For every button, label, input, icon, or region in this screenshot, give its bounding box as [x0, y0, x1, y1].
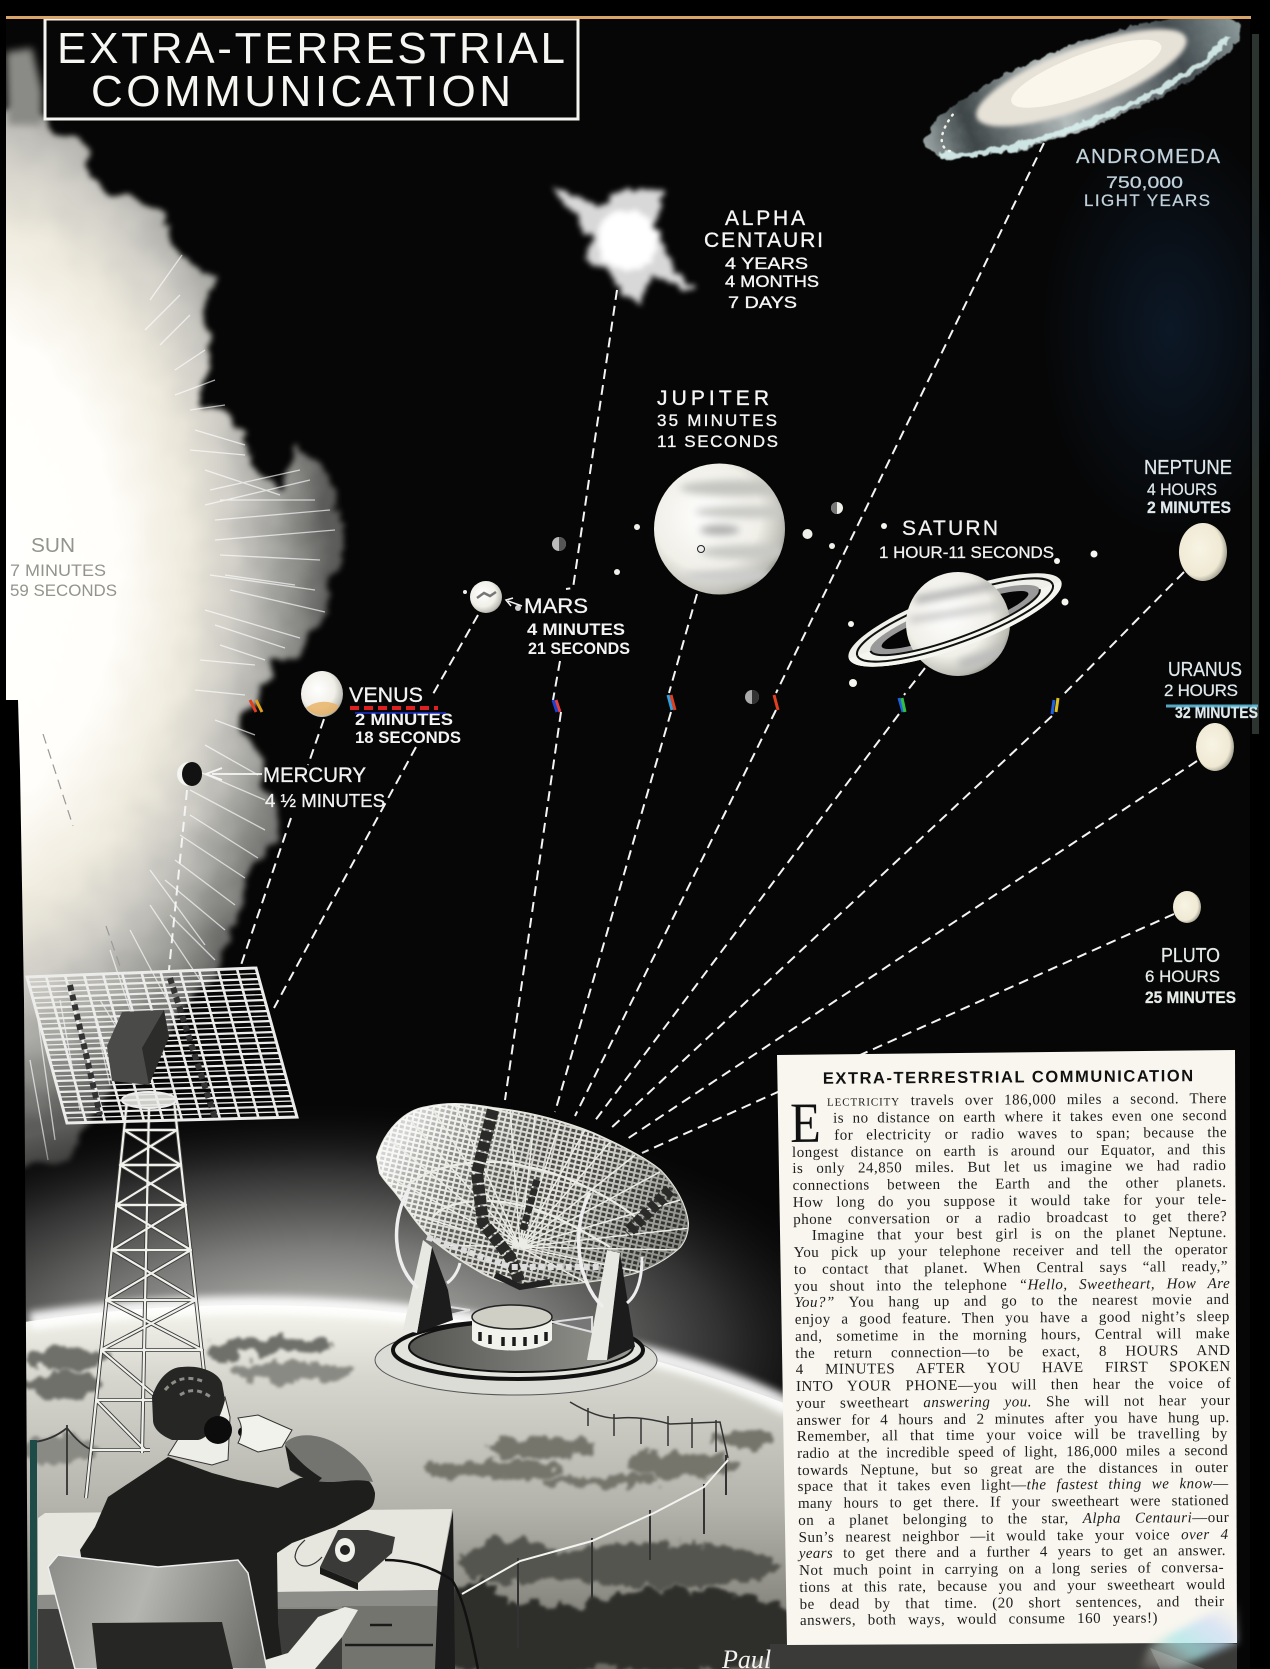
- jupiter label: JUPITER: [657, 387, 769, 410]
- text panel copy: space that it takes even light—the fastest thing we know—: [798, 1476, 1229, 1495]
- dish bowl: [370, 1100, 695, 1290]
- solar rays: [30, 255, 335, 1160]
- text panel copy: to contact that planet. When Central says “all ready,”: [794, 1259, 1228, 1278]
- grid antenna panel: [27, 968, 297, 1123]
- jacket and lower sleeve: [80, 1457, 375, 1669]
- text panel copy: Not much point in carrying on a long series of conversa-: [799, 1560, 1224, 1579]
- rainbow print misregistration marks: [250, 695, 1058, 714]
- text panel copy: Remember, all that time your voice will be travelling by: [797, 1426, 1228, 1445]
- arrow: mercury pointer: [206, 768, 262, 780]
- mercury label: MERCURY: [263, 764, 366, 787]
- arrow: mars pointer: [506, 598, 522, 606]
- andromeda label: 750,000: [1106, 173, 1183, 192]
- alpha centauri label: 7 DAYS: [728, 293, 797, 312]
- venus label: 18 SECONDS: [355, 728, 461, 747]
- saturn label: 1 HOUR-11 SECONDS: [879, 543, 1054, 562]
- neptune label: NEPTUNE: [1144, 457, 1232, 479]
- mars label: [524, 595, 630, 658]
- hand: [238, 1415, 292, 1452]
- text panel copy: your sweetheart answering you. She will not hear your: [796, 1393, 1230, 1412]
- jupiter label: 11 SECONDS: [657, 432, 778, 451]
- text panel copy: INTO YOUR PHONE—you will then hear the voice of: [796, 1376, 1231, 1395]
- clouds below text panel: [770, 1644, 1240, 1669]
- sun label: SUN: [31, 535, 75, 557]
- text panel background: [777, 1050, 1237, 1645]
- uranus label: URANUS: [1168, 659, 1242, 681]
- neptune label: 4 HOURS: [1147, 480, 1217, 499]
- sky glow above earth: [20, 1095, 800, 1395]
- uranus label: 2 HOURS: [1164, 681, 1238, 700]
- jupiter label: [657, 387, 778, 451]
- text panel copy: 4 MINUTES AFTER YOU HAVE FIRST SPOKEN: [796, 1359, 1231, 1378]
- jupiter: [654, 464, 785, 594]
- mars label: 4 MINUTES: [527, 620, 625, 639]
- text panel copy: many hours to get there. If your sweetheart were stationed: [798, 1493, 1229, 1512]
- venus label: VENUS: [349, 684, 423, 707]
- parabolic dish antenna: [370, 1100, 695, 1395]
- text panel copy: LECTRICITY travels over 186,000 miles a second. There: [827, 1091, 1227, 1110]
- alpha centauri label: CENTAURI: [704, 229, 823, 252]
- right page margin: [1250, 0, 1270, 1669]
- pluto: [1173, 891, 1201, 923]
- blue nebula tint: [1040, 120, 1270, 540]
- text panel copy: for electricity or radio waves to span; because the: [834, 1125, 1227, 1144]
- mercury label: [263, 764, 385, 811]
- sun label: 59 SECONDS: [10, 581, 117, 600]
- alpha centauri star: [551, 186, 694, 304]
- telephone receiver: [204, 1416, 248, 1444]
- saturn label: SATURN: [902, 517, 998, 540]
- title text: COMMUNICATION: [91, 67, 511, 116]
- alpha centauri label: ALPHA: [725, 207, 805, 230]
- text panel copy: longest distance on earth is around our Equator, and this: [792, 1142, 1226, 1161]
- text panel copy: connections between the Earth and the other planets.: [792, 1175, 1227, 1194]
- dashed signal lines: [43, 143, 1197, 1153]
- uranus label: [1164, 659, 1258, 722]
- title box: [45, 19, 578, 119]
- telephone: [295, 1530, 478, 1669]
- text panel copy: towards Neptune, but so great are the distances in outer: [797, 1460, 1228, 1479]
- hair: [152, 1367, 225, 1440]
- neck and face: [168, 1397, 230, 1465]
- saturn moons: [848, 523, 1098, 687]
- venus: [301, 671, 343, 717]
- text panel copy: Imagine that your best girl is on the planet Neptune.: [812, 1225, 1227, 1244]
- saturn label: [879, 517, 1054, 562]
- text panel copy: answer for 4 hours and 2 minutes after you have hung up.: [797, 1409, 1230, 1428]
- text panel copy: enjoy a good feature. Then you have a good night’s sleep: [795, 1309, 1230, 1328]
- andromeda galaxy: [910, 0, 1254, 185]
- venus label: 2 MINUTES: [355, 710, 453, 729]
- dish support legs: [397, 1187, 642, 1360]
- text panel copy: phone conversation or a radio broadcast to get there?: [793, 1209, 1227, 1228]
- rainbow glare on panel: [1140, 1600, 1237, 1669]
- pluto label: 25 MINUTES: [1145, 988, 1236, 1007]
- text panel copy: is no distance on earth where it takes even one second: [833, 1108, 1227, 1127]
- andromeda label: LIGHT YEARS: [1084, 191, 1210, 210]
- alpha centauri label: 4 MONTHS: [725, 272, 819, 291]
- sun label: 7 MINUTES: [10, 561, 106, 580]
- left poles: [34, 1425, 92, 1495]
- text panel copy: answers, both ways, would consume 160 years!): [800, 1611, 1158, 1629]
- desk: [38, 1509, 455, 1669]
- feed horn box: [107, 1010, 169, 1085]
- text panel copy: tions at this rate, because you and your sweetheart would: [799, 1577, 1225, 1596]
- text panel copy: You pick up your telephone receiver and tell the operator: [794, 1242, 1228, 1261]
- text panel copy: the return connection—to be exact, 8 HOURS AND: [795, 1342, 1230, 1361]
- jupiter moons: [552, 502, 843, 704]
- text panel copy: and, sometime in the morning hours, Central will make: [795, 1326, 1230, 1345]
- mercury: [177, 762, 202, 786]
- sun label: [10, 535, 117, 600]
- text panel copy: be dead by that time. (20 short sentences, and their: [800, 1594, 1225, 1613]
- telephone wires and poles: [462, 1402, 728, 1648]
- earth surface: [0, 1290, 1240, 1669]
- neptune label: [1144, 457, 1232, 517]
- neptune label: 2 MINUTES: [1147, 498, 1231, 517]
- article text: [792, 1091, 1231, 1629]
- mars label: 21 SECONDS: [528, 639, 630, 658]
- alpha centauri label: 4 YEARS: [725, 254, 808, 273]
- text panel copy: you shout into the telephone “Hello, Sweetheart, How Are: [794, 1275, 1230, 1294]
- upper sleeve: [285, 1435, 373, 1482]
- pluto label: 6 HOURS: [1145, 967, 1220, 986]
- mercury label: 4 ½ MINUTES: [265, 791, 385, 811]
- text panel copy: You?” You hang up and go to the nearest movie and: [794, 1292, 1230, 1311]
- venus label: [349, 684, 461, 747]
- sun: [0, 48, 346, 1170]
- clouds: [22, 1337, 800, 1669]
- neptune: [1179, 523, 1227, 581]
- chair: [48, 1555, 358, 1669]
- man on phone: [80, 1367, 375, 1669]
- mars label: MARS: [524, 595, 588, 618]
- andromeda label: ANDROMEDA: [1076, 145, 1220, 168]
- drop cap: E: [790, 1092, 821, 1155]
- alpha centauri label: [704, 207, 823, 312]
- lattice tower: [86, 1092, 204, 1498]
- text panel copy: radio at the incredible speed of light, 186,000 miles a second: [797, 1443, 1228, 1462]
- title text: EXTRA-TERRESTRIAL: [57, 24, 565, 73]
- pluto label: [1145, 945, 1236, 1007]
- jupiter label: 35 MINUTES: [657, 411, 777, 430]
- saturn: [848, 572, 1062, 676]
- text panel copy: Sun’s nearest neighbor —it would take your voice over 4: [799, 1527, 1229, 1546]
- pluto label: PLUTO: [1161, 945, 1220, 967]
- andromeda label: [1076, 145, 1220, 210]
- dish central building: [423, 1303, 592, 1350]
- dish base platform: [375, 1321, 657, 1395]
- mars: [463, 581, 521, 613]
- uranus: [1196, 723, 1234, 771]
- panel heading: EXTRA-TERRESTRIAL COMMUNICATION: [823, 1067, 1195, 1088]
- text panel copy: How long do you suppose it would take for your tele-: [793, 1192, 1227, 1211]
- text panel copy: years to get there and a further 4 years to get an answer.: [799, 1543, 1226, 1562]
- text panel copy: is only 24,850 miles. But let us imagine we had radio: [792, 1158, 1226, 1177]
- text panel copy: on a planet belonging to the star, Alpha Centauri—our: [798, 1510, 1229, 1529]
